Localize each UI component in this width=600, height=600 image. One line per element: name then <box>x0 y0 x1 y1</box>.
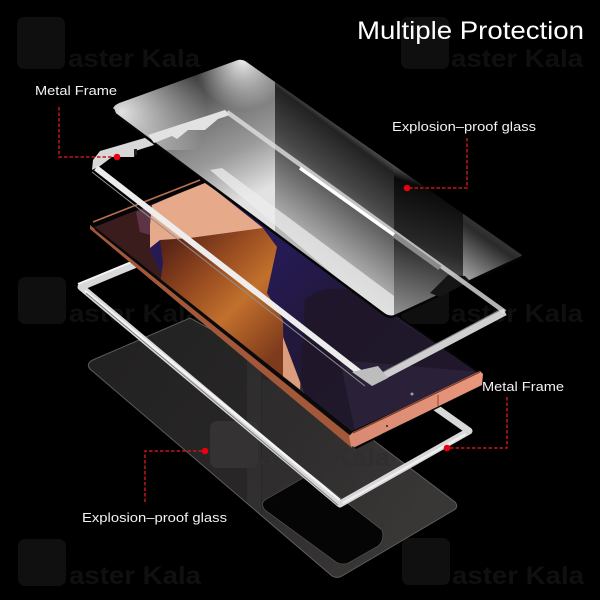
label: glass top right: Explosion–proof glass <box>392 119 537 134</box>
top explosion-proof glass <box>113 60 522 318</box>
wallpaper dark shape <box>300 289 480 432</box>
callout: glass top right <box>404 138 467 191</box>
copper left edge <box>90 225 352 448</box>
watermark bottom left <box>18 539 202 590</box>
watermark second row right <box>401 277 584 328</box>
watermark top right <box>401 17 584 73</box>
upper metal frame (visible through glass) <box>148 110 505 312</box>
salmon bottom edge <box>349 371 483 447</box>
label: metal frame top left: Metal Frame <box>35 83 117 98</box>
camera cutout <box>262 474 383 564</box>
watermark bottom right: aster Kala <box>452 562 585 590</box>
upper metal frame (behind glass) <box>92 137 505 386</box>
watermark middle: aster Kala <box>260 444 391 472</box>
copper top edge <box>93 180 200 222</box>
callout: glass bottom left <box>145 448 208 502</box>
callout: metal frame right <box>444 397 507 451</box>
screen wallpaper <box>95 183 477 431</box>
callout: metal frame top left <box>59 107 120 160</box>
watermark second row left: aster Kala <box>69 300 202 328</box>
watermark top right: aster Kala <box>451 45 584 73</box>
label: glass bottom left: Explosion–proof glass <box>82 510 228 525</box>
back explosion-proof glass <box>88 318 462 580</box>
watermark bottom right <box>402 538 585 590</box>
watermark top left: aster Kala <box>68 45 201 73</box>
lower metal frame <box>78 222 469 505</box>
wallpaper orange area <box>160 228 284 385</box>
phone <box>80 170 500 450</box>
watermark bottom left: aster Kala <box>69 562 202 590</box>
wallpaper maroon area <box>95 203 212 320</box>
title: Multiple Protection <box>357 17 584 45</box>
wallpaper peach area <box>150 182 263 248</box>
phone body <box>90 180 482 449</box>
watermark top left <box>17 17 201 73</box>
watermark middle <box>210 421 391 472</box>
label: metal frame right: Metal Frame <box>482 379 564 394</box>
watermark second row right: aster Kala <box>451 300 584 328</box>
glass notch <box>430 275 470 297</box>
watermark second row left <box>18 277 202 328</box>
glass black edge <box>113 109 522 317</box>
wallpaper peach sliver <box>283 337 305 395</box>
